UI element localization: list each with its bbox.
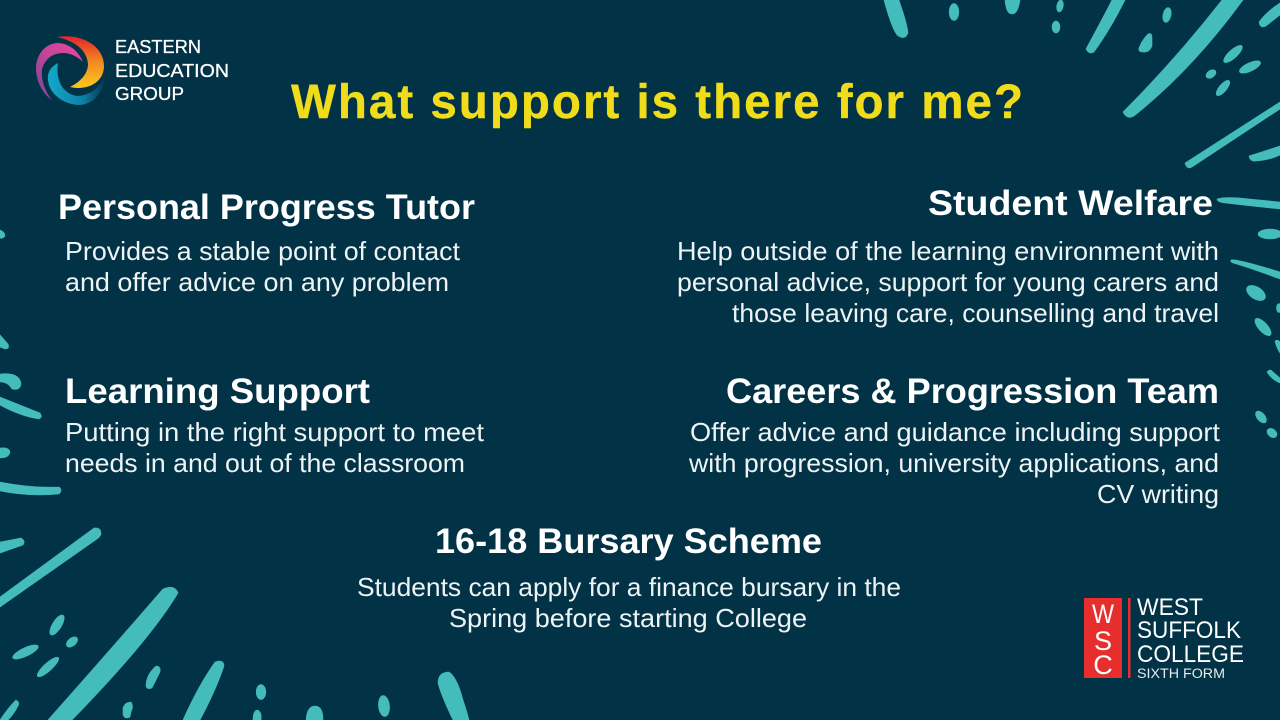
college wordmark bbox=[1137, 594, 1244, 681]
text block: personal advice, support for young carers and bbox=[677, 267, 1219, 297]
text block: Provides a stable point of contact bbox=[65, 236, 461, 266]
college wordmark: COLLEGE bbox=[1137, 641, 1244, 668]
title: What support is there for me? bbox=[291, 76, 1025, 129]
text block: needs in and out of the classroom bbox=[65, 448, 465, 478]
text block: and offer advice on any problem bbox=[65, 267, 449, 297]
text block: Spring before starting College bbox=[449, 603, 807, 633]
text block: Students can apply for a finance bursary in the bbox=[357, 572, 901, 602]
icon: WSC red block: S bbox=[1094, 626, 1112, 656]
college wordmark: SUFFOLK bbox=[1137, 617, 1241, 644]
decorative splashes: left and bottom bbox=[0, 230, 469, 720]
icon: WSC red block: C bbox=[1093, 650, 1113, 680]
heading: Careers & Progression Team bbox=[726, 372, 1219, 411]
heading: Learning Support bbox=[65, 372, 370, 411]
panel: Learning Support bbox=[65, 372, 485, 478]
icon: WSC red block bbox=[1084, 598, 1130, 680]
text block: CV writing bbox=[1097, 479, 1219, 509]
text block: with progression, university applications, and bbox=[688, 448, 1219, 478]
heading: Personal Progress Tutor bbox=[58, 188, 475, 227]
logo wordmark: EASTERN bbox=[115, 36, 201, 57]
heading: Student Welfare bbox=[928, 184, 1213, 223]
text block: those leaving care, counselling and travel bbox=[732, 298, 1219, 328]
logo: West Suffolk College Sixth Form bbox=[1084, 594, 1244, 681]
logo wordmark: EDUCATION bbox=[115, 60, 229, 81]
logo wordmark bbox=[115, 36, 229, 104]
text block bbox=[65, 236, 461, 297]
panel: Careers & Progression Team bbox=[688, 372, 1221, 509]
panel: Personal Progress Tutor bbox=[58, 188, 475, 297]
text block: Putting in the right support to meet bbox=[65, 417, 485, 447]
logo: Eastern Education Group bbox=[36, 36, 229, 105]
panel: 16-18 Bursary Scheme bbox=[357, 522, 901, 633]
icon: swirl logo bbox=[36, 36, 106, 105]
text block bbox=[357, 572, 901, 633]
college wordmark: WEST bbox=[1137, 594, 1203, 621]
panel: Student Welfare bbox=[677, 184, 1219, 328]
decorative splashes: top right bbox=[884, 0, 1280, 440]
text block: Offer advice and guidance including support bbox=[690, 417, 1221, 447]
text block bbox=[677, 236, 1219, 328]
text block bbox=[688, 417, 1221, 509]
text block: Help outside of the learning environment with bbox=[677, 236, 1219, 266]
heading: 16-18 Bursary Scheme bbox=[435, 522, 822, 561]
logo wordmark: GROUP bbox=[115, 83, 184, 104]
college wordmark: SIXTH FORM bbox=[1137, 666, 1225, 681]
text block bbox=[65, 417, 485, 478]
icon: WSC red block: W bbox=[1092, 599, 1114, 629]
